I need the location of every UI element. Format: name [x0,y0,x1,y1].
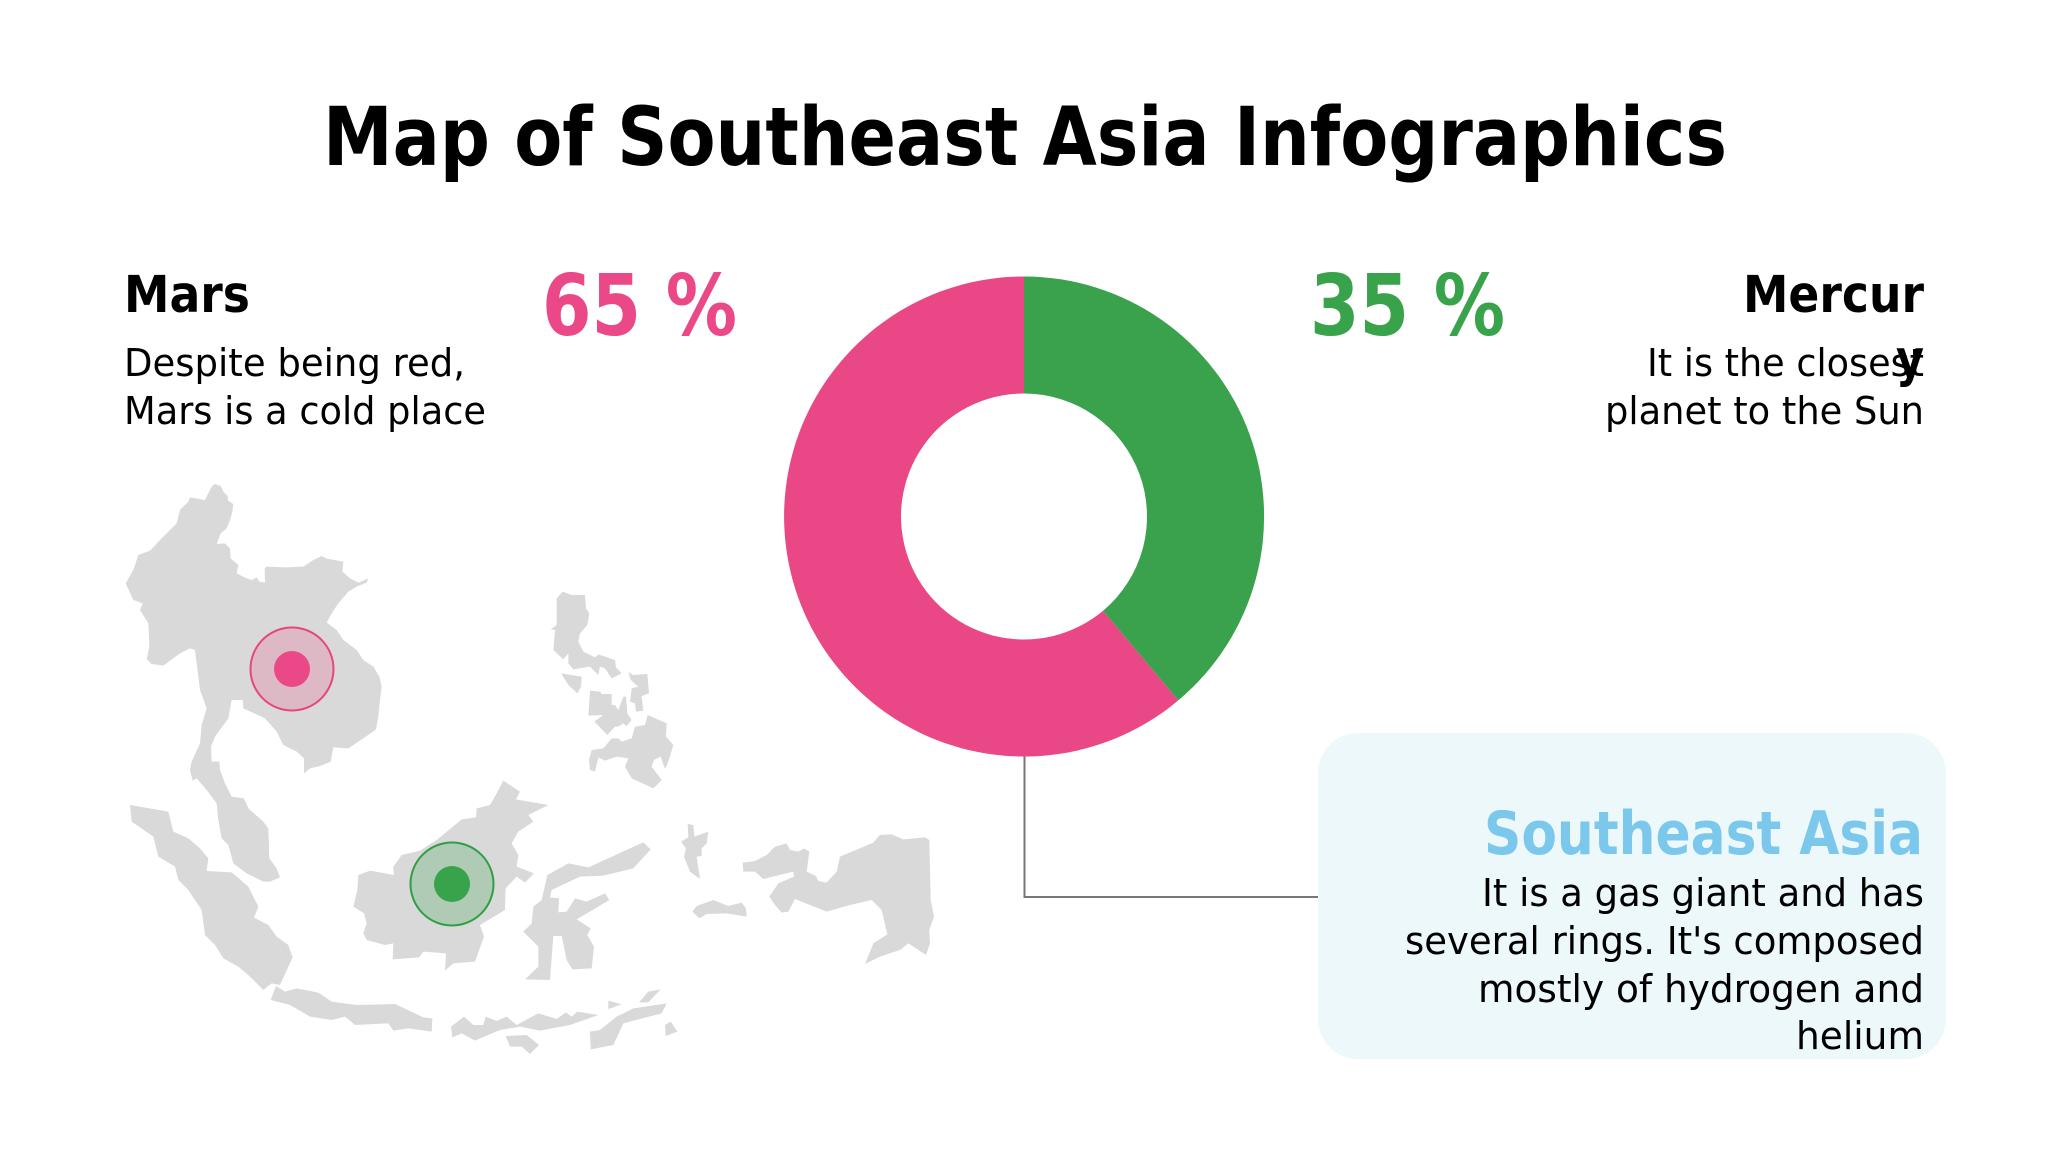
panel: Southeast Asia [1318,733,1946,1059]
percentage: 65 %: 65 % [542,257,737,356]
panel background [1318,733,1946,1059]
map: Maluku and Papua [681,824,934,964]
panel description [1405,871,1924,1059]
heading: Mercury (wrapped) [1743,266,1924,389]
description: Mars: Despite being red, [124,341,465,386]
description: Mercury [1605,341,1924,434]
map: Sumatra and Java [130,805,432,1032]
map marker: pink [250,628,334,710]
map: Philippines [551,592,673,788]
panel description: It is a gas giant and has [1482,871,1924,916]
heading: Mercury (wrapped): Mercur [1743,266,1924,325]
map: mainland and Malay peninsula [126,484,382,882]
panel description: helium [1796,1014,1924,1059]
connector line [1024,756,1318,897]
panel heading: Southeast Asia [1484,799,1923,869]
title: Map of Southeast Asia Infographics [323,91,1727,185]
map marker: green [410,842,494,926]
donut chart [784,276,1264,756]
description: Mercury: planet to the Sun [1605,389,1924,434]
text block: Mercury [1605,266,1924,434]
donut segment: 65% pink [784,276,1178,756]
map: Borneo, Sulawesi and Lesser Sunda [353,781,677,1054]
percentage: 35 %: 35 % [1310,257,1505,356]
heading: Mercury (wrapped): y [1896,330,1924,389]
description: Mercury: It is the closest [1647,341,1924,386]
panel description: several rings. It's composed [1405,919,1924,964]
heading: Mars: Mars [124,266,250,325]
description: Mars: Mars is a cold place [124,389,486,434]
panel description: mostly of hydrogen and [1478,967,1924,1012]
donut segment: 35% green [1024,276,1264,700]
text block: Mars [124,266,486,434]
description: Mars [124,341,486,434]
map of Southeast Asia [126,484,934,1054]
